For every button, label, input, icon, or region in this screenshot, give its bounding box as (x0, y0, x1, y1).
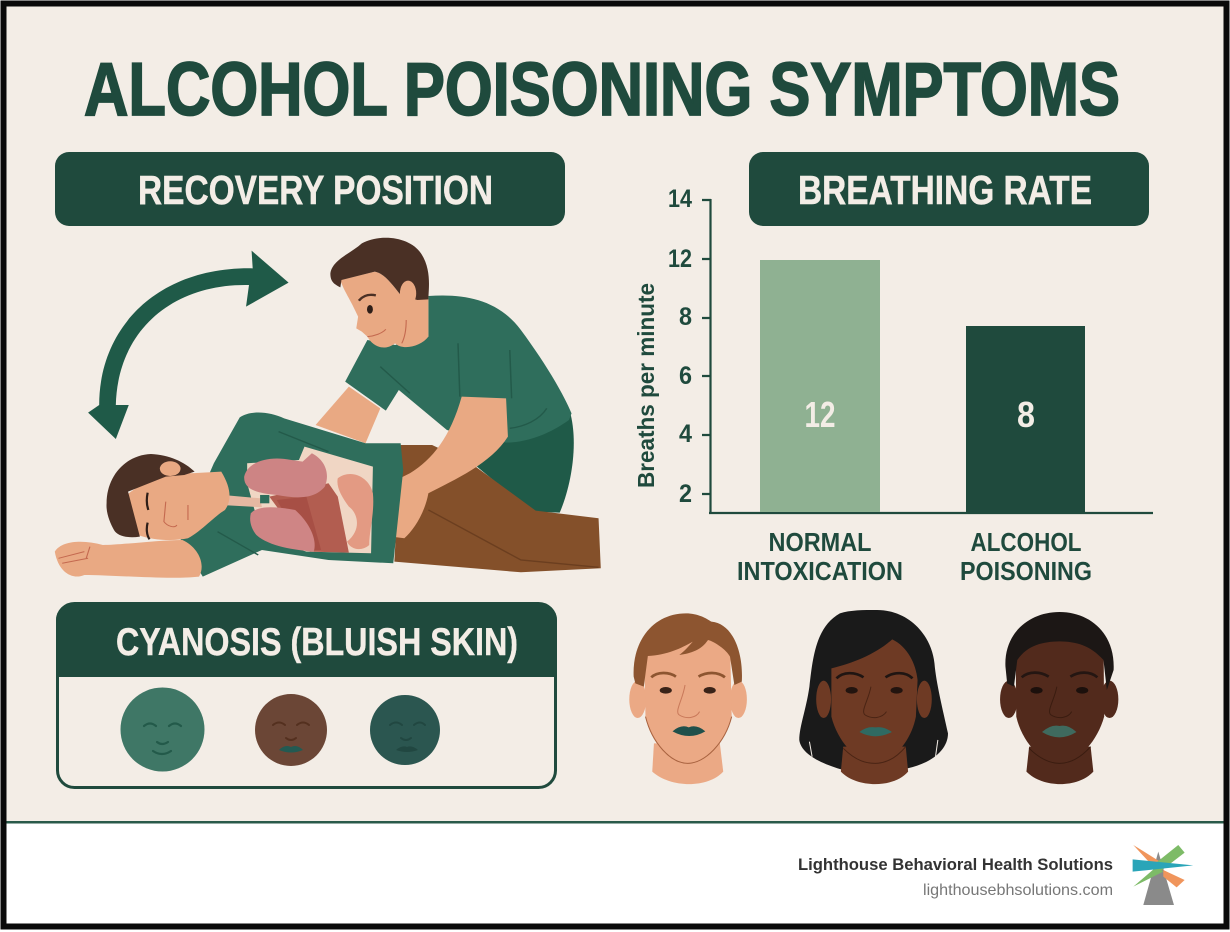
category label: normal intoxication (737, 527, 903, 586)
heading: breathing rate (749, 152, 1149, 226)
victim arm (55, 540, 202, 578)
logo: lighthouse (1133, 845, 1193, 905)
category label: alcohol poisoning: POISONING (960, 556, 1092, 586)
panel heading text: CYANOSIS (BLUISH SKIN) (116, 621, 518, 664)
rescuer shirt (345, 295, 572, 443)
y axis ticks and labels: 8 (679, 303, 692, 331)
bar: normal intoxication (760, 260, 880, 512)
y axis ticks and labels (668, 185, 692, 508)
footer: website: lighthousebhsolutions.com (923, 882, 1113, 899)
bar chart: breathing rate (633, 185, 1153, 586)
heading: recovery position: RECOVERY POSITION (138, 167, 493, 213)
y axis ticks and labels: 6 (679, 362, 692, 390)
panel header (56, 603, 557, 677)
face: dark skin with short hair (1000, 612, 1118, 784)
y axis title: Breaths per minute (633, 283, 659, 488)
bar: alcohol poisoning: 8 (1017, 394, 1035, 435)
y axis ticks and labels: 12 (668, 245, 692, 273)
y axis ticks and labels: 4 (679, 420, 692, 448)
illustration: recovery position (55, 238, 601, 578)
face: light skin (629, 613, 747, 784)
rescuer head (330, 238, 429, 348)
exposed organs (221, 447, 373, 553)
bar: normal intoxication: 12 (804, 394, 836, 435)
victim shirt (181, 413, 403, 577)
rescuer far arm (316, 387, 380, 443)
y axis ticks and labels: 14 (668, 185, 692, 213)
face: medium dark skin with long hair (799, 610, 948, 784)
category label: alcohol poisoning: ALCOHOL (970, 527, 1082, 557)
category label: normal intoxication: NORMAL (768, 527, 872, 557)
icon: brown face (255, 694, 327, 766)
illustrations: faces with cyanotic lips (629, 610, 1118, 784)
heading: breathing rate: BREATHING RATE (798, 167, 1092, 213)
category label: normal intoxication: INTOXICATION (737, 556, 903, 586)
y axis ticks and labels: 2 (679, 480, 692, 508)
bar: alcohol poisoning (966, 326, 1085, 512)
footer: organisation name: Lighthouse Behavioral Health Solutions (798, 856, 1113, 874)
category label: alcohol poisoning (960, 527, 1092, 586)
icon: teal face (120, 688, 204, 772)
victim trousers (394, 445, 601, 572)
rescuer near arm (375, 397, 508, 538)
victim head (107, 454, 230, 540)
panel: cyanosis (56, 603, 557, 788)
arrow: rotation direction (88, 251, 289, 439)
heading: recovery position (55, 152, 565, 226)
icon: dark teal face (370, 695, 440, 765)
rescuer trousers (443, 415, 574, 513)
